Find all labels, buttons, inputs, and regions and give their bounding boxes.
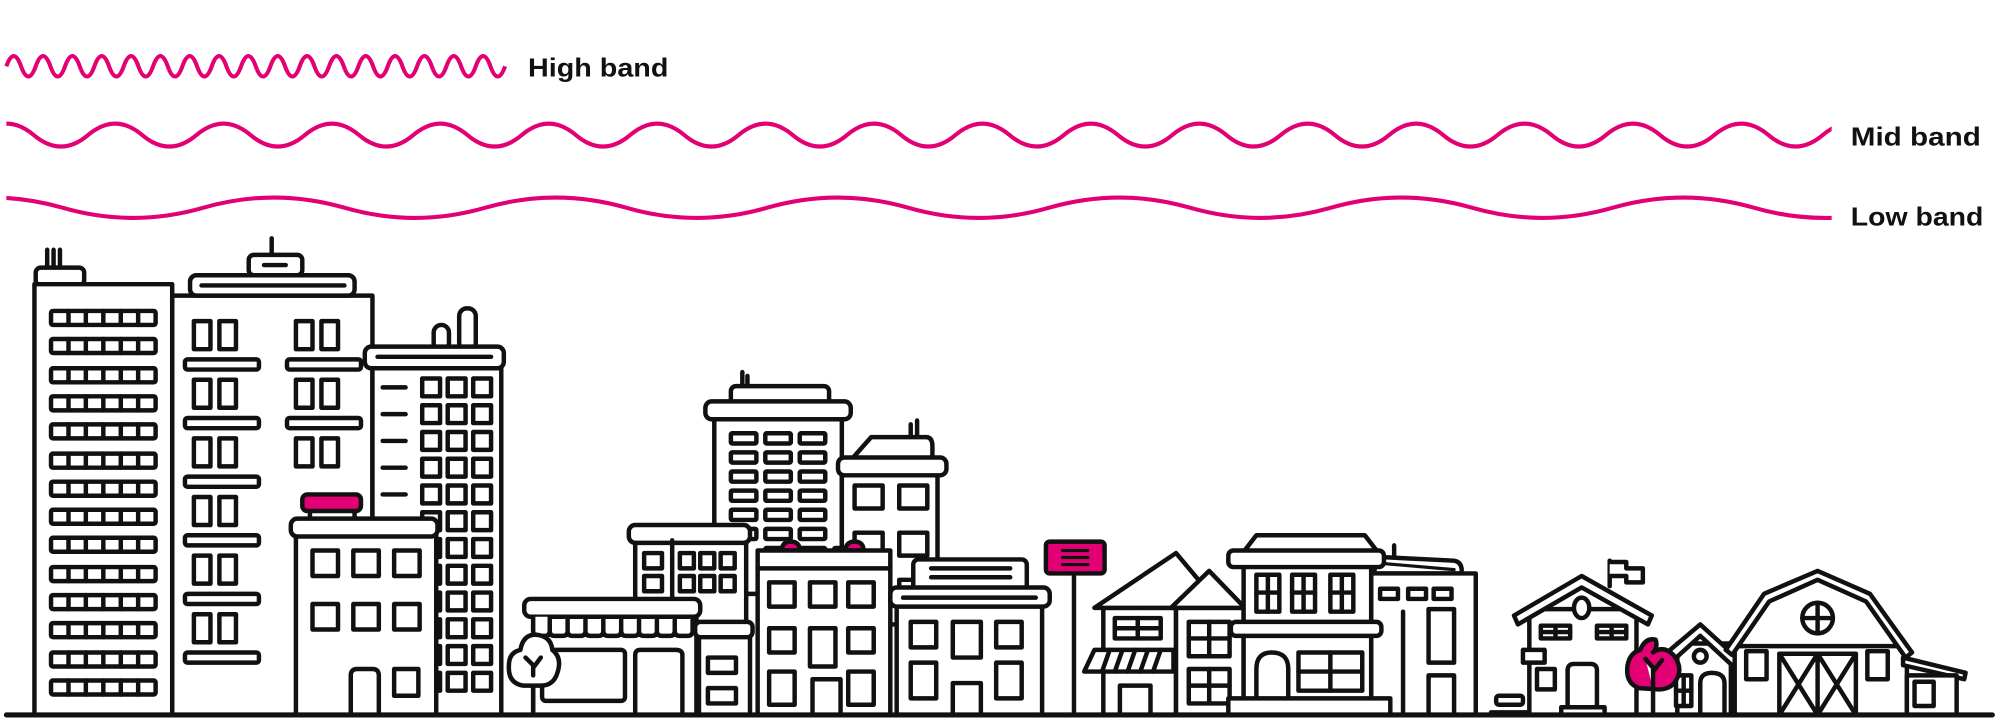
building: narrow side block <box>695 622 753 715</box>
building: house with two gables <box>1084 553 1245 715</box>
wave: mid band <box>0 124 1877 147</box>
wave: low band <box>0 198 1895 218</box>
label: mid band: Mid band <box>1851 123 1981 151</box>
building: barn <box>1726 571 1966 715</box>
label: high band: High band <box>528 54 668 82</box>
building: low block with pink roof unit <box>291 494 438 715</box>
building: house with flag <box>1514 561 1652 715</box>
building: tower with slanted top <box>838 421 946 624</box>
building: narrow tower with chimneys <box>365 308 504 715</box>
icon: pink sign <box>1046 542 1105 715</box>
building: tall tower left <box>34 250 172 715</box>
building: storefront block <box>890 559 1050 715</box>
city skyline <box>34 238 1966 715</box>
wave: high band <box>6 56 505 76</box>
building: wide tower with balconies <box>172 238 372 715</box>
building: townhouse with arched door <box>1228 535 1476 715</box>
building: mid-rise tower <box>705 372 860 594</box>
ground line <box>6 713 1992 717</box>
icon: bench <box>1491 696 1528 712</box>
icon: tree (white) <box>509 635 559 715</box>
building: small cottage <box>1667 624 1742 715</box>
icon: pink tree <box>1627 639 1679 715</box>
building: block with pink domes <box>758 542 890 715</box>
building: shop with awning <box>524 599 700 715</box>
label: low band: Low band <box>1851 204 1983 232</box>
building: block behind shop <box>629 525 750 715</box>
